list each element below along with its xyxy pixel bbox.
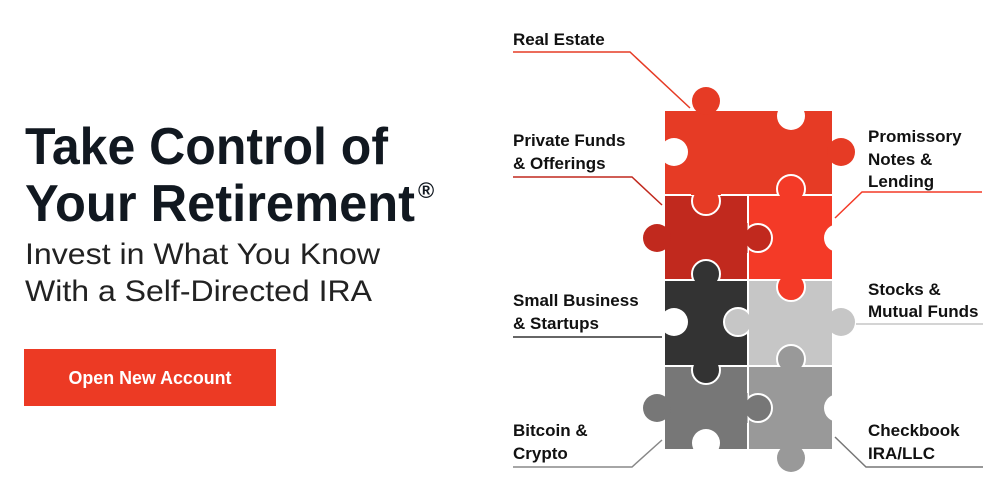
label: small business: Small Business — [513, 291, 639, 310]
label: real estate — [513, 30, 690, 108]
label: promissory notes: Promissory — [868, 127, 962, 146]
subtitle: Invest in What You Know — [25, 238, 380, 271]
title: ® — [418, 178, 434, 203]
button: open new account: Open New Account — [68, 368, 232, 388]
title: Your Retirement — [25, 175, 415, 233]
title — [25, 118, 434, 233]
label: stocks: Mutual Funds — [868, 302, 978, 321]
label: small business — [513, 291, 662, 337]
subtitle — [25, 238, 380, 308]
label: promissory notes: Notes & — [868, 150, 932, 169]
title: Take Control of — [25, 118, 389, 176]
label: stocks: Stocks & — [868, 280, 941, 299]
label: real estate: Real Estate — [513, 30, 605, 49]
label: promissory notes: Lending — [868, 172, 934, 191]
label: bitcoin: Bitcoin & — [513, 421, 588, 440]
label: private funds: Private Funds — [513, 131, 625, 150]
subtitle: With a Self-Directed IRA — [25, 275, 372, 308]
label: promissory notes — [835, 127, 982, 218]
puzzle graphic — [643, 87, 855, 472]
label: stocks — [856, 280, 983, 324]
label: private funds: & Offerings — [513, 154, 606, 173]
label: checkbook ira: IRA/LLC — [868, 444, 935, 463]
label: checkbook ira — [835, 421, 983, 467]
label: bitcoin: Crypto — [513, 444, 568, 463]
label: private funds — [513, 131, 662, 205]
label: checkbook ira: Checkbook — [868, 421, 960, 440]
label: small business: & Startups — [513, 314, 599, 333]
label: bitcoin — [513, 421, 662, 467]
button: open new account — [24, 349, 276, 406]
